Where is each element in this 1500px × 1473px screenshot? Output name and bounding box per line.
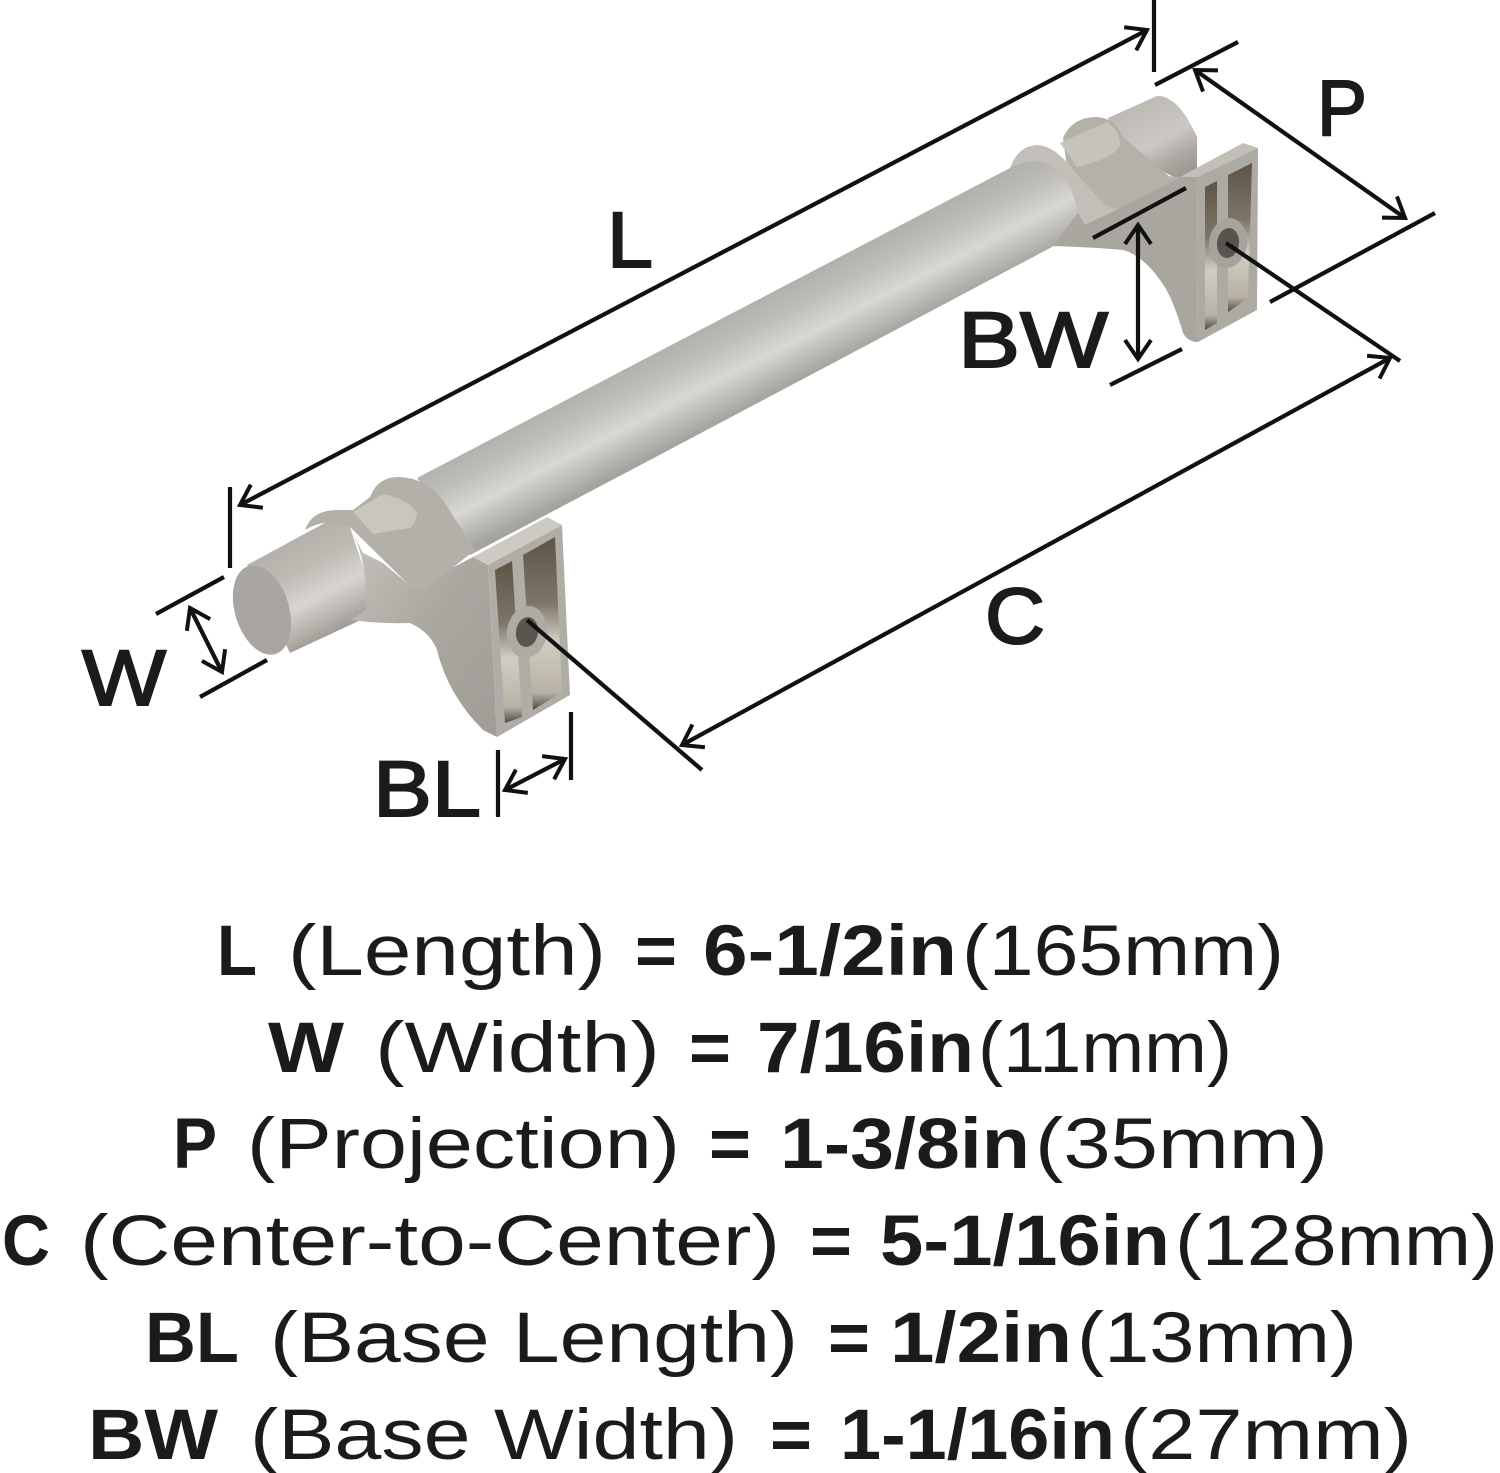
label BL: BL [373, 744, 481, 833]
spec line: projection: P [173, 1105, 217, 1184]
spec line: width: (Width) [375, 1009, 660, 1088]
spec line: base width: BW [88, 1396, 218, 1473]
spec line: base length: = [828, 1299, 870, 1378]
spec line: center-to-center: C [2, 1202, 50, 1281]
dimension BW: base width arrow and extension lines [1093, 188, 1186, 385]
spec line: base width [88, 1396, 1412, 1473]
dimension W: width arrow and extension lines [156, 577, 267, 697]
dimension C: center-to-center arrow and leader lines [527, 243, 1400, 770]
spec line: center-to-center: (Center-to-Center) [80, 1202, 780, 1281]
spec line: center-to-center: = [810, 1202, 852, 1281]
product photo: cabinet pull handle [223, 96, 1258, 737]
spec line: base width: (Base Width) [250, 1396, 738, 1473]
spec line: length: L [217, 912, 257, 991]
spec line: projection: = [709, 1105, 751, 1184]
spec line: base length: 1/2in [890, 1299, 1072, 1378]
label W: W [82, 633, 166, 722]
label L: L [607, 195, 653, 284]
dimension L: length arrow and extension lines [230, 0, 1154, 568]
spec line: length: (165mm) [962, 912, 1284, 991]
right stud end [1108, 96, 1197, 180]
dimension BL: base length arrow and extension lines [498, 712, 571, 817]
spec line: base length: BL [145, 1299, 239, 1378]
spec line: projection: 1-3/8in [780, 1105, 1030, 1184]
spec line: length: = [635, 912, 677, 991]
left screw insert [504, 603, 550, 661]
spec line: center-to-center: 5-1/16in [880, 1202, 1170, 1281]
spec line: base width: = [770, 1396, 812, 1473]
spec line: length: (Length) [288, 912, 606, 991]
right bracket [1010, 117, 1258, 342]
spec line: length [217, 912, 1284, 991]
spec list: dimension values [2, 912, 1498, 1473]
spec line: width: W [268, 1009, 344, 1088]
left stud end [223, 512, 378, 662]
spec line: width: (11mm) [978, 1009, 1232, 1088]
spec line: center-to-center: (128mm) [1175, 1202, 1498, 1281]
left bracket [305, 477, 570, 737]
diagram letter labels [82, 63, 1367, 833]
spec line: width [268, 1009, 1232, 1088]
spec line: base width: 1-1/16in [840, 1396, 1115, 1473]
spec line: length: 6-1/2in [703, 912, 957, 991]
dimension P: projection arrow and extension lines [1155, 42, 1435, 302]
spec line: projection [173, 1105, 1328, 1184]
handle bar [417, 161, 1078, 555]
label C: C [985, 571, 1045, 660]
spec line: width: 7/16in [757, 1009, 974, 1088]
label BW: BW [958, 295, 1109, 384]
spec line: projection: (35mm) [1035, 1105, 1328, 1184]
spec line: base width: (27mm) [1120, 1396, 1412, 1473]
label P: P [1317, 63, 1367, 152]
spec line: base length [145, 1299, 1357, 1378]
spec line: base length: (Base Length) [270, 1299, 798, 1378]
spec line: projection: (Projection) [247, 1105, 680, 1184]
right screw insert [1206, 216, 1250, 270]
spec line: width: = [689, 1009, 731, 1088]
spec line: base length: (13mm) [1077, 1299, 1357, 1378]
spec line: center-to-center [2, 1202, 1498, 1281]
